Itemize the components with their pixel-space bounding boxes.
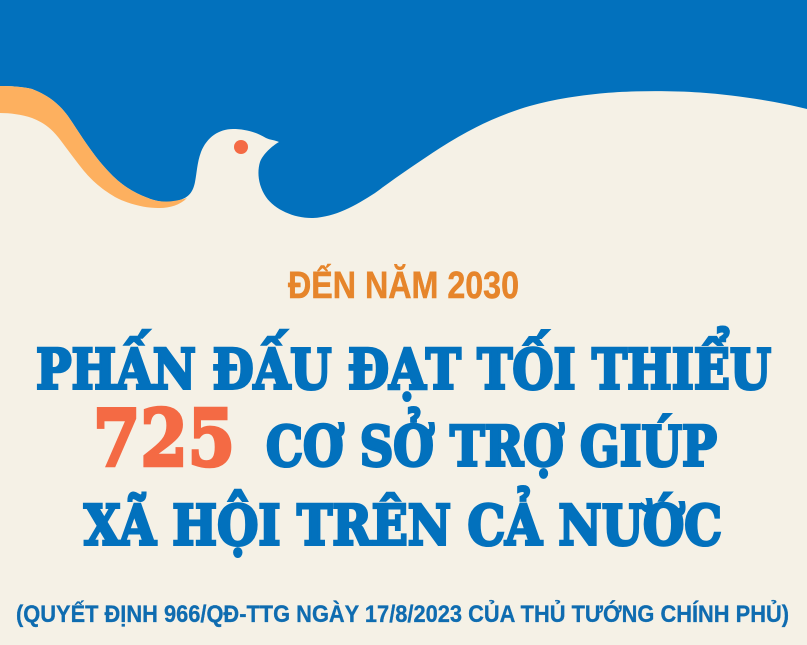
number 725: 725 [93, 394, 235, 484]
orange ribbon [0, 86, 187, 208]
icon: dove eye [234, 140, 248, 154]
title line 2: CƠ SỞ TRỢ GIÚP [266, 408, 717, 478]
blue sky with dove silhouette [0, 0, 807, 218]
subtitle: ĐẾN NĂM 2030 [288, 263, 519, 307]
title line 3: XÃ HỘI TRÊN CẢ NƯỚC [84, 488, 722, 558]
